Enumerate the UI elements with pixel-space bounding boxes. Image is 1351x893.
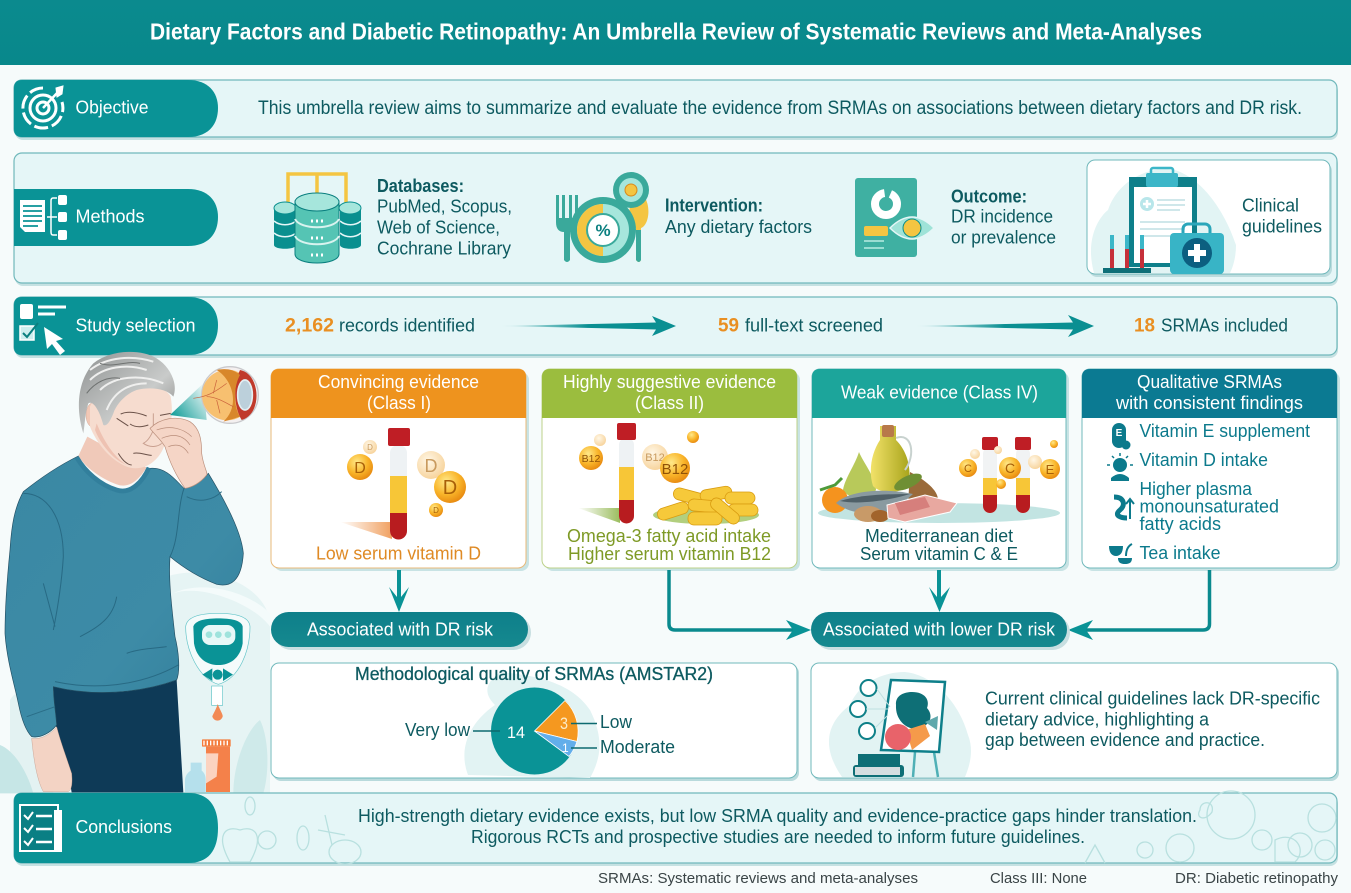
pill: associated with DR risk: Associated with DR risk: [307, 620, 494, 640]
heading: (Class I): [367, 393, 431, 413]
pill: associated with lower DR risk: [811, 612, 1070, 650]
label: objective: Objective: [76, 96, 148, 118]
step: SRMAs included: SRMAs included: [1161, 314, 1288, 336]
evidence items: [567, 526, 771, 564]
intervention text: Any dietary factors: [665, 217, 812, 237]
raised hand: [150, 418, 207, 488]
item: tea intake: Tea intake: [1140, 542, 1220, 563]
guideline gap text: Current clinical guidelines lack DR-specific: [985, 688, 1320, 708]
illustration: vitamin D blood tube: [340, 428, 466, 540]
conclusions text: Rigorous RCTs and prospective studies are needed to inform future guidelines.: [471, 827, 1085, 847]
sweater: [5, 456, 243, 737]
icon: vitamin D intake: [1107, 453, 1133, 481]
evidence items: Omega-3 fatty acid intake: [567, 526, 771, 546]
label: methods: Methods: [76, 206, 144, 226]
arrow: records to full-text: [500, 316, 676, 336]
heading: Weak evidence (Class IV): [841, 382, 1038, 402]
pie chart: [491, 688, 578, 774]
label: conclusions: Conclusions: [76, 816, 172, 837]
databases text: [377, 176, 512, 258]
icon: plasma fatty acids: [1114, 497, 1134, 519]
item: higher plasma monounsaturated fatty acids: [1140, 478, 1279, 534]
panel: guideline gap: [811, 663, 1339, 781]
outcome text: Outcome:: [951, 186, 1027, 206]
title banner: [0, 0, 1351, 65]
panel: methodological quality: [271, 663, 799, 781]
card: clinical guidelines: [1087, 160, 1332, 277]
illustration: Mediterranean diet foods: E: [1046, 462, 1055, 477]
illustration: Mediterranean diet foods: [818, 425, 1060, 523]
pie chart: 14: [507, 723, 525, 742]
eye: [202, 367, 258, 423]
icon: plate with percent: [556, 172, 649, 263]
evidence items: Serum vitamin C & E: [860, 544, 1018, 564]
hair: [79, 352, 175, 433]
arrow: class I to DR risk: [389, 570, 409, 612]
icon: plate with percent: %: [595, 221, 611, 240]
icon: target: [23, 86, 63, 128]
illustration: Mediterranean diet foods: C: [1005, 460, 1015, 476]
pie legend labels: Low: [600, 712, 633, 732]
panel: conclusions: [14, 791, 1338, 866]
evidence items: Mediterranean diet: [865, 526, 1013, 546]
item: vitamin D intake: Vitamin D intake: [1140, 449, 1268, 470]
pie chart: 1: [562, 741, 569, 755]
intervention text: [665, 196, 812, 237]
conclusions text: [358, 806, 1197, 847]
guideline gap text: [985, 688, 1320, 750]
heading: Convincing evidence: [318, 372, 479, 392]
footnotes: DR: Diabetic retinopathy: [1175, 870, 1338, 887]
icon: checklist and cursor: [20, 304, 66, 355]
facial features: [117, 412, 171, 465]
heading: with consistent findings: [1115, 393, 1303, 413]
clinical guidelines text: [1242, 196, 1322, 236]
illustration: vitamin D blood tube: D: [424, 456, 438, 476]
card: convincing evidence class I: [271, 369, 529, 571]
heading: (Class II): [635, 393, 704, 413]
illustration: vitamin D blood tube: D: [367, 443, 373, 452]
heading: [318, 372, 479, 413]
glucose meter: [186, 613, 250, 684]
item: higher plasma monounsaturated fatty acids: fatty acids: [1140, 513, 1221, 534]
pie legend labels: Very low: [405, 720, 471, 740]
neck: [78, 437, 147, 486]
heading: [1115, 372, 1303, 413]
guideline gap text: gap between evidence and practice.: [985, 730, 1265, 750]
decorative fruit outlines: [223, 791, 1336, 864]
step: records identified: records identified: [339, 314, 475, 336]
illustration: vitamin D blood tube: D: [443, 477, 457, 499]
illustration: vitamin B12 tube and capsules: B12: [645, 452, 665, 464]
databases text: Web of Science,: [377, 218, 500, 238]
heading: Qualitative SRMAs: [1137, 372, 1282, 392]
icon: tea: [1109, 544, 1132, 564]
pants: [53, 680, 183, 793]
icon: methods tree: [20, 195, 67, 240]
databases text: PubMed, Scopus,: [377, 196, 512, 216]
step: full-text screened: full-text screened: [745, 314, 883, 336]
databases text: Cochrane Library: [377, 238, 511, 258]
illustration: vitamin B12 tube and capsules: [578, 423, 759, 527]
heading: Highly suggestive evidence: [563, 372, 776, 392]
step: SRMAs included: 18: [1134, 316, 1155, 336]
pie legend labels: Moderate: [600, 737, 675, 757]
card: highly suggestive evidence class II: [542, 369, 800, 571]
title banner: Dietary Factors and Diabetic Retinopathy: An Umbrella Review of Systematic Reviews and Meta-Analyses: [150, 18, 1202, 44]
item: higher plasma monounsaturated fatty acids: monounsaturated: [1140, 496, 1279, 516]
databases text: Databases:: [377, 176, 464, 196]
item: higher plasma monounsaturated fatty acids: Higher plasma: [1140, 478, 1253, 499]
pie chart: 3: [560, 714, 568, 733]
step: full-text screened: 59: [718, 316, 739, 336]
evidence items: [860, 526, 1018, 564]
icon: vitamin E supplement: E: [1116, 428, 1123, 439]
objective text: This umbrella review aims to summarize and evaluate the evidence from SRMAs on associations between dietary factors and DR risk.: [258, 98, 1302, 119]
panel: objective: [14, 80, 1338, 140]
medication bottle: [206, 747, 230, 792]
pie legend labels: [405, 712, 675, 757]
clinical guidelines text: Clinical: [1242, 196, 1299, 216]
label: study selection: Study selection: [76, 314, 196, 336]
illustration: guideline board with food: [850, 680, 945, 777]
arrow: class IV to lower DR risk: [929, 570, 950, 612]
collar: [77, 457, 149, 491]
card: weak evidence class IV: [812, 369, 1069, 571]
pill: associated with lower DR risk: Associated with lower DR risk: [823, 620, 1056, 640]
outcome text: [951, 186, 1056, 248]
icon: vitamin E supplement: [1112, 423, 1130, 450]
step: records identified: 2,162: [285, 316, 334, 336]
outcome text: or prevalence: [951, 228, 1056, 248]
illustration: vitamin B12 tube and capsules: B12: [582, 453, 600, 465]
panel: study selection: [14, 297, 1338, 358]
icon: databases: [274, 174, 361, 263]
illustration: vitamin D blood tube: D: [433, 506, 439, 515]
icon: conclusions checklist: [20, 805, 62, 852]
icon: clipboard, tubes and first-aid kit: [1103, 168, 1224, 274]
clinical guidelines text: guidelines: [1242, 216, 1322, 236]
arrow: qualitative elbow to lower DR risk: [1068, 570, 1210, 640]
arrow: full-text to included: [915, 315, 1094, 337]
illustration: vitamin D blood tube: D: [354, 460, 366, 477]
footnotes: SRMAs: Systematic reviews and meta-analyses: [598, 870, 918, 887]
illustration: Mediterranean diet foods: C: [964, 463, 972, 475]
lower hand: [32, 727, 72, 792]
illustration: vitamin B12 tube and capsules: B12: [662, 461, 688, 478]
ear: [86, 403, 99, 427]
evidence item: Low serum vitamin D: [316, 544, 481, 564]
card: qualitative SRMAs: [1082, 369, 1340, 571]
footnotes: Class III: None: [990, 870, 1087, 887]
evidence items: Higher serum vitamin B12: [568, 544, 771, 564]
guideline gap text: dietary advice, highlighting a: [985, 710, 1210, 730]
footnotes: [598, 870, 1338, 887]
step: records identified: [285, 314, 475, 336]
face: [90, 384, 172, 468]
panel: methods: [14, 153, 1338, 286]
pill: associated with DR risk: [271, 612, 531, 650]
intervention text: Intervention:: [665, 196, 763, 216]
item: vitamin E supplement: Vitamin E supplement: [1140, 420, 1310, 441]
icon: outcome document with eye: [855, 178, 934, 257]
illustration: patient with eye, glucose meter and medication: [0, 352, 270, 793]
arrow: class II elbow to lower DR risk: [669, 570, 811, 640]
conclusions text: High-strength dietary evidence exists, but low SRMA quality and evidence-practice gaps hinder translation.: [358, 806, 1197, 826]
heading: Methodological quality of SRMAs (AMSTAR2): [355, 664, 713, 684]
heading: [563, 372, 776, 413]
outcome text: DR incidence: [951, 206, 1053, 226]
cone: [170, 383, 207, 420]
